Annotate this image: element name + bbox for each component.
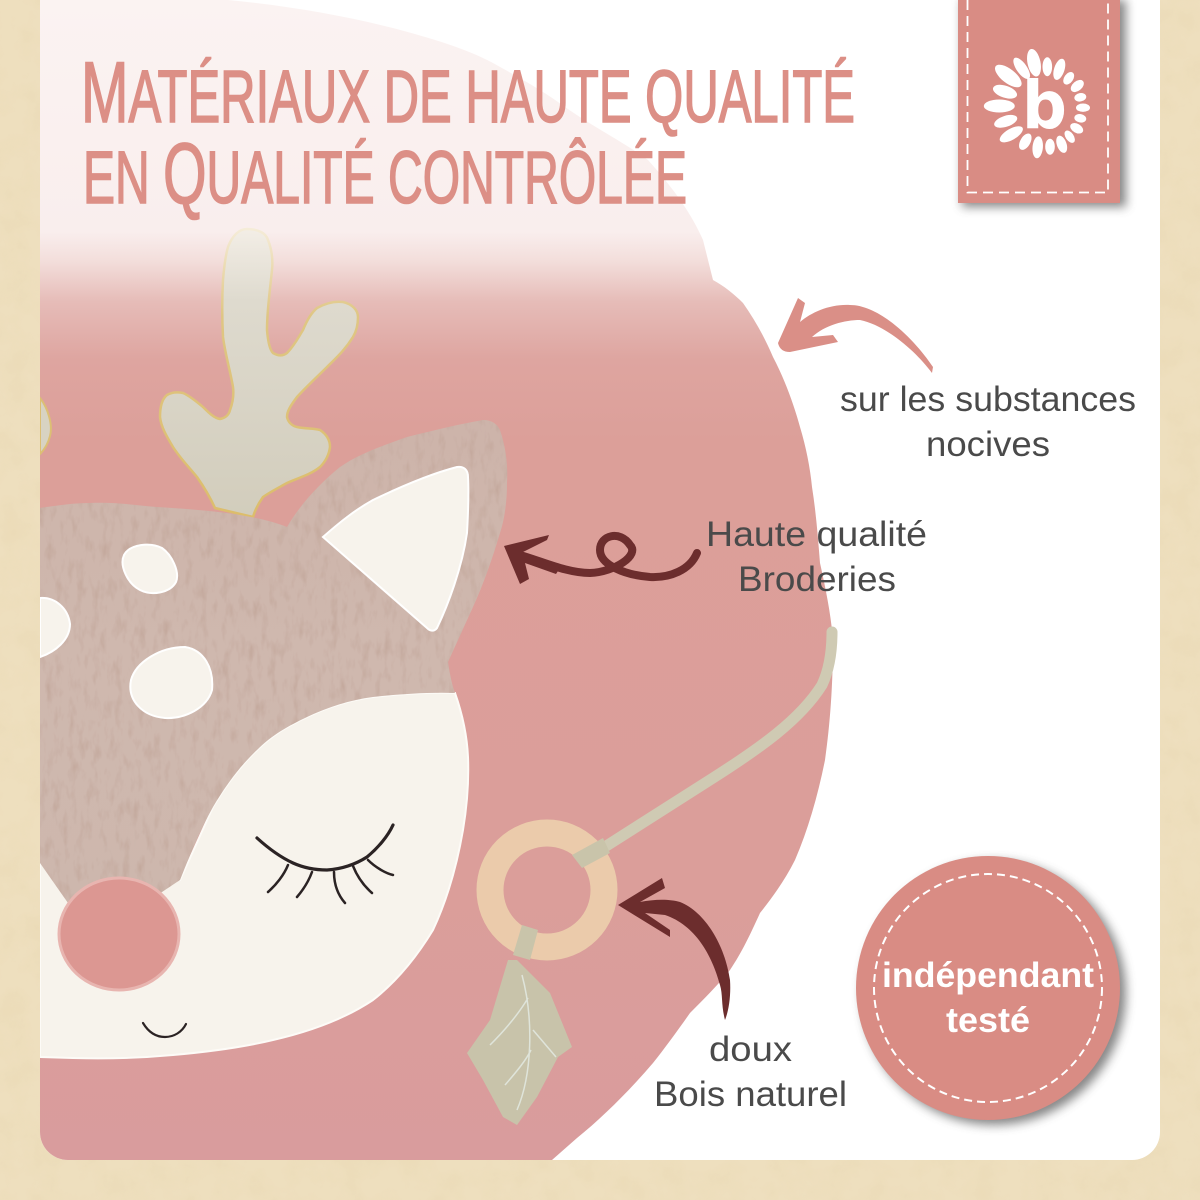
embroidery line 2: Broderies bbox=[738, 560, 896, 599]
logo letter: b bbox=[1022, 68, 1067, 144]
cushion with deer bbox=[40, 0, 833, 1160]
deer face cream bbox=[40, 693, 468, 1058]
tag shadow bbox=[962, 0, 1126, 207]
arrow: harmful substances bbox=[778, 298, 933, 373]
forehead spot large bbox=[130, 647, 212, 718]
forehead spot top bbox=[123, 545, 177, 593]
label: harmful substances bbox=[840, 380, 1136, 464]
badge stitching bbox=[874, 874, 1102, 1102]
label line 1: sur les substances bbox=[840, 380, 1136, 419]
label: embroidery bbox=[706, 515, 927, 599]
badge text: indépendant bbox=[882, 956, 1094, 995]
embroidery line 1: Haute qualité bbox=[706, 515, 927, 554]
logo petals bbox=[984, 48, 1090, 159]
badge: independently tested bbox=[856, 856, 1126, 1125]
label line 2: nocives bbox=[926, 425, 1050, 464]
badge shadow bbox=[862, 861, 1126, 1125]
closed eye bbox=[257, 825, 393, 903]
tag stitching bbox=[968, 0, 1108, 192]
wood line 2: Bois naturel bbox=[654, 1075, 847, 1114]
mouth bbox=[143, 1023, 186, 1037]
wooden ring bbox=[490, 833, 604, 947]
deer head fur bbox=[40, 420, 507, 903]
badge text: testé bbox=[946, 1001, 1030, 1040]
main antler bbox=[160, 229, 358, 517]
badge circle bbox=[856, 856, 1120, 1120]
nose bbox=[59, 878, 179, 990]
inner ear bbox=[323, 467, 468, 631]
label: natural wood bbox=[654, 1030, 847, 1114]
ribbon bbox=[600, 632, 832, 850]
forehead spot left bbox=[40, 598, 70, 657]
arrow: natural wood bbox=[618, 878, 730, 1020]
wood line 1: doux bbox=[709, 1030, 793, 1069]
brand tag bbox=[958, 0, 1126, 207]
tag body bbox=[958, 0, 1120, 203]
title line 2: EN QUALITÉ CONTRÔLÉE bbox=[83, 126, 687, 222]
title line 1: MATÉRIAUX DE HAUTE QUALITÉ bbox=[81, 45, 855, 141]
ribbon loop bottom bbox=[513, 925, 538, 960]
badge text bbox=[882, 956, 1094, 1040]
arrow: embroidery bbox=[504, 535, 697, 584]
cushion body bbox=[40, 0, 833, 1160]
title bbox=[81, 45, 855, 222]
ribbon loop top bbox=[572, 838, 610, 868]
leaf bbox=[467, 960, 572, 1125]
left antler fragment bbox=[40, 398, 51, 454]
